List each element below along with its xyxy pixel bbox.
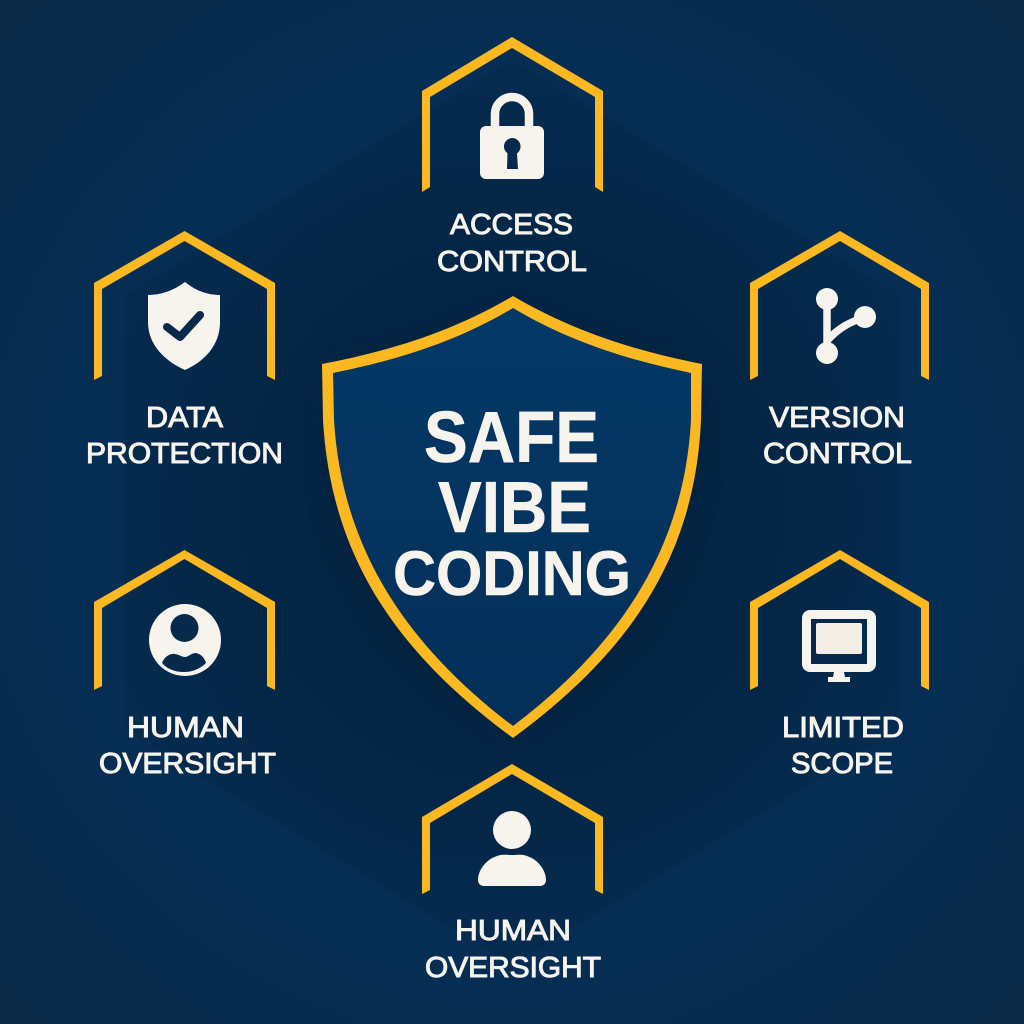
label: limited scope: SCOPE [791, 748, 893, 780]
icon: user in circle [149, 604, 221, 676]
label: data protection [86, 402, 283, 470]
item: human oversight left [94, 550, 276, 780]
item: access control [422, 37, 603, 278]
icon: branch [816, 288, 876, 364]
icon: shield with check [148, 282, 220, 370]
label: limited scope [782, 712, 904, 780]
label: human oversight bottom: HUMAN [455, 915, 571, 947]
frame: limited scope [750, 550, 929, 690]
frame: version control [750, 231, 929, 380]
label: access control: CONTROL [437, 246, 587, 278]
label: human oversight bottom: OVERSIGHT [425, 952, 601, 984]
label: access control: ACCESS [450, 209, 573, 241]
shield title: CODING [393, 539, 631, 609]
central shield [322, 296, 702, 738]
label: version control [763, 402, 912, 470]
shield title: SAFE [424, 398, 599, 478]
background hexagon [125, 60, 900, 965]
item: version control [750, 231, 929, 470]
label: version control: VERSION [769, 402, 905, 434]
icon: person [478, 811, 546, 886]
label: human oversight left: OVERSIGHT [99, 748, 276, 780]
item: human oversight bottom [422, 764, 603, 984]
shield title: VIBE [438, 468, 591, 548]
frame: human oversight bottom [422, 764, 603, 894]
icon: padlock [480, 97, 544, 179]
label: limited scope: LIMITED [782, 712, 904, 744]
label: human oversight bottom [425, 915, 601, 984]
shield title [393, 398, 631, 609]
frame: access control [422, 37, 603, 192]
item: data protection [86, 231, 283, 470]
label: human oversight left: HUMAN [127, 712, 244, 744]
label: version control: CONTROL [763, 438, 912, 470]
frame: human oversight left [94, 550, 275, 690]
label: data protection: PROTECTION [86, 438, 283, 470]
item: limited scope [750, 550, 929, 780]
icon: monitor [802, 610, 876, 682]
label: human oversight left [99, 712, 276, 780]
frame: data protection [94, 231, 275, 380]
label: access control [437, 209, 587, 278]
label: data protection: DATA [146, 402, 224, 434]
